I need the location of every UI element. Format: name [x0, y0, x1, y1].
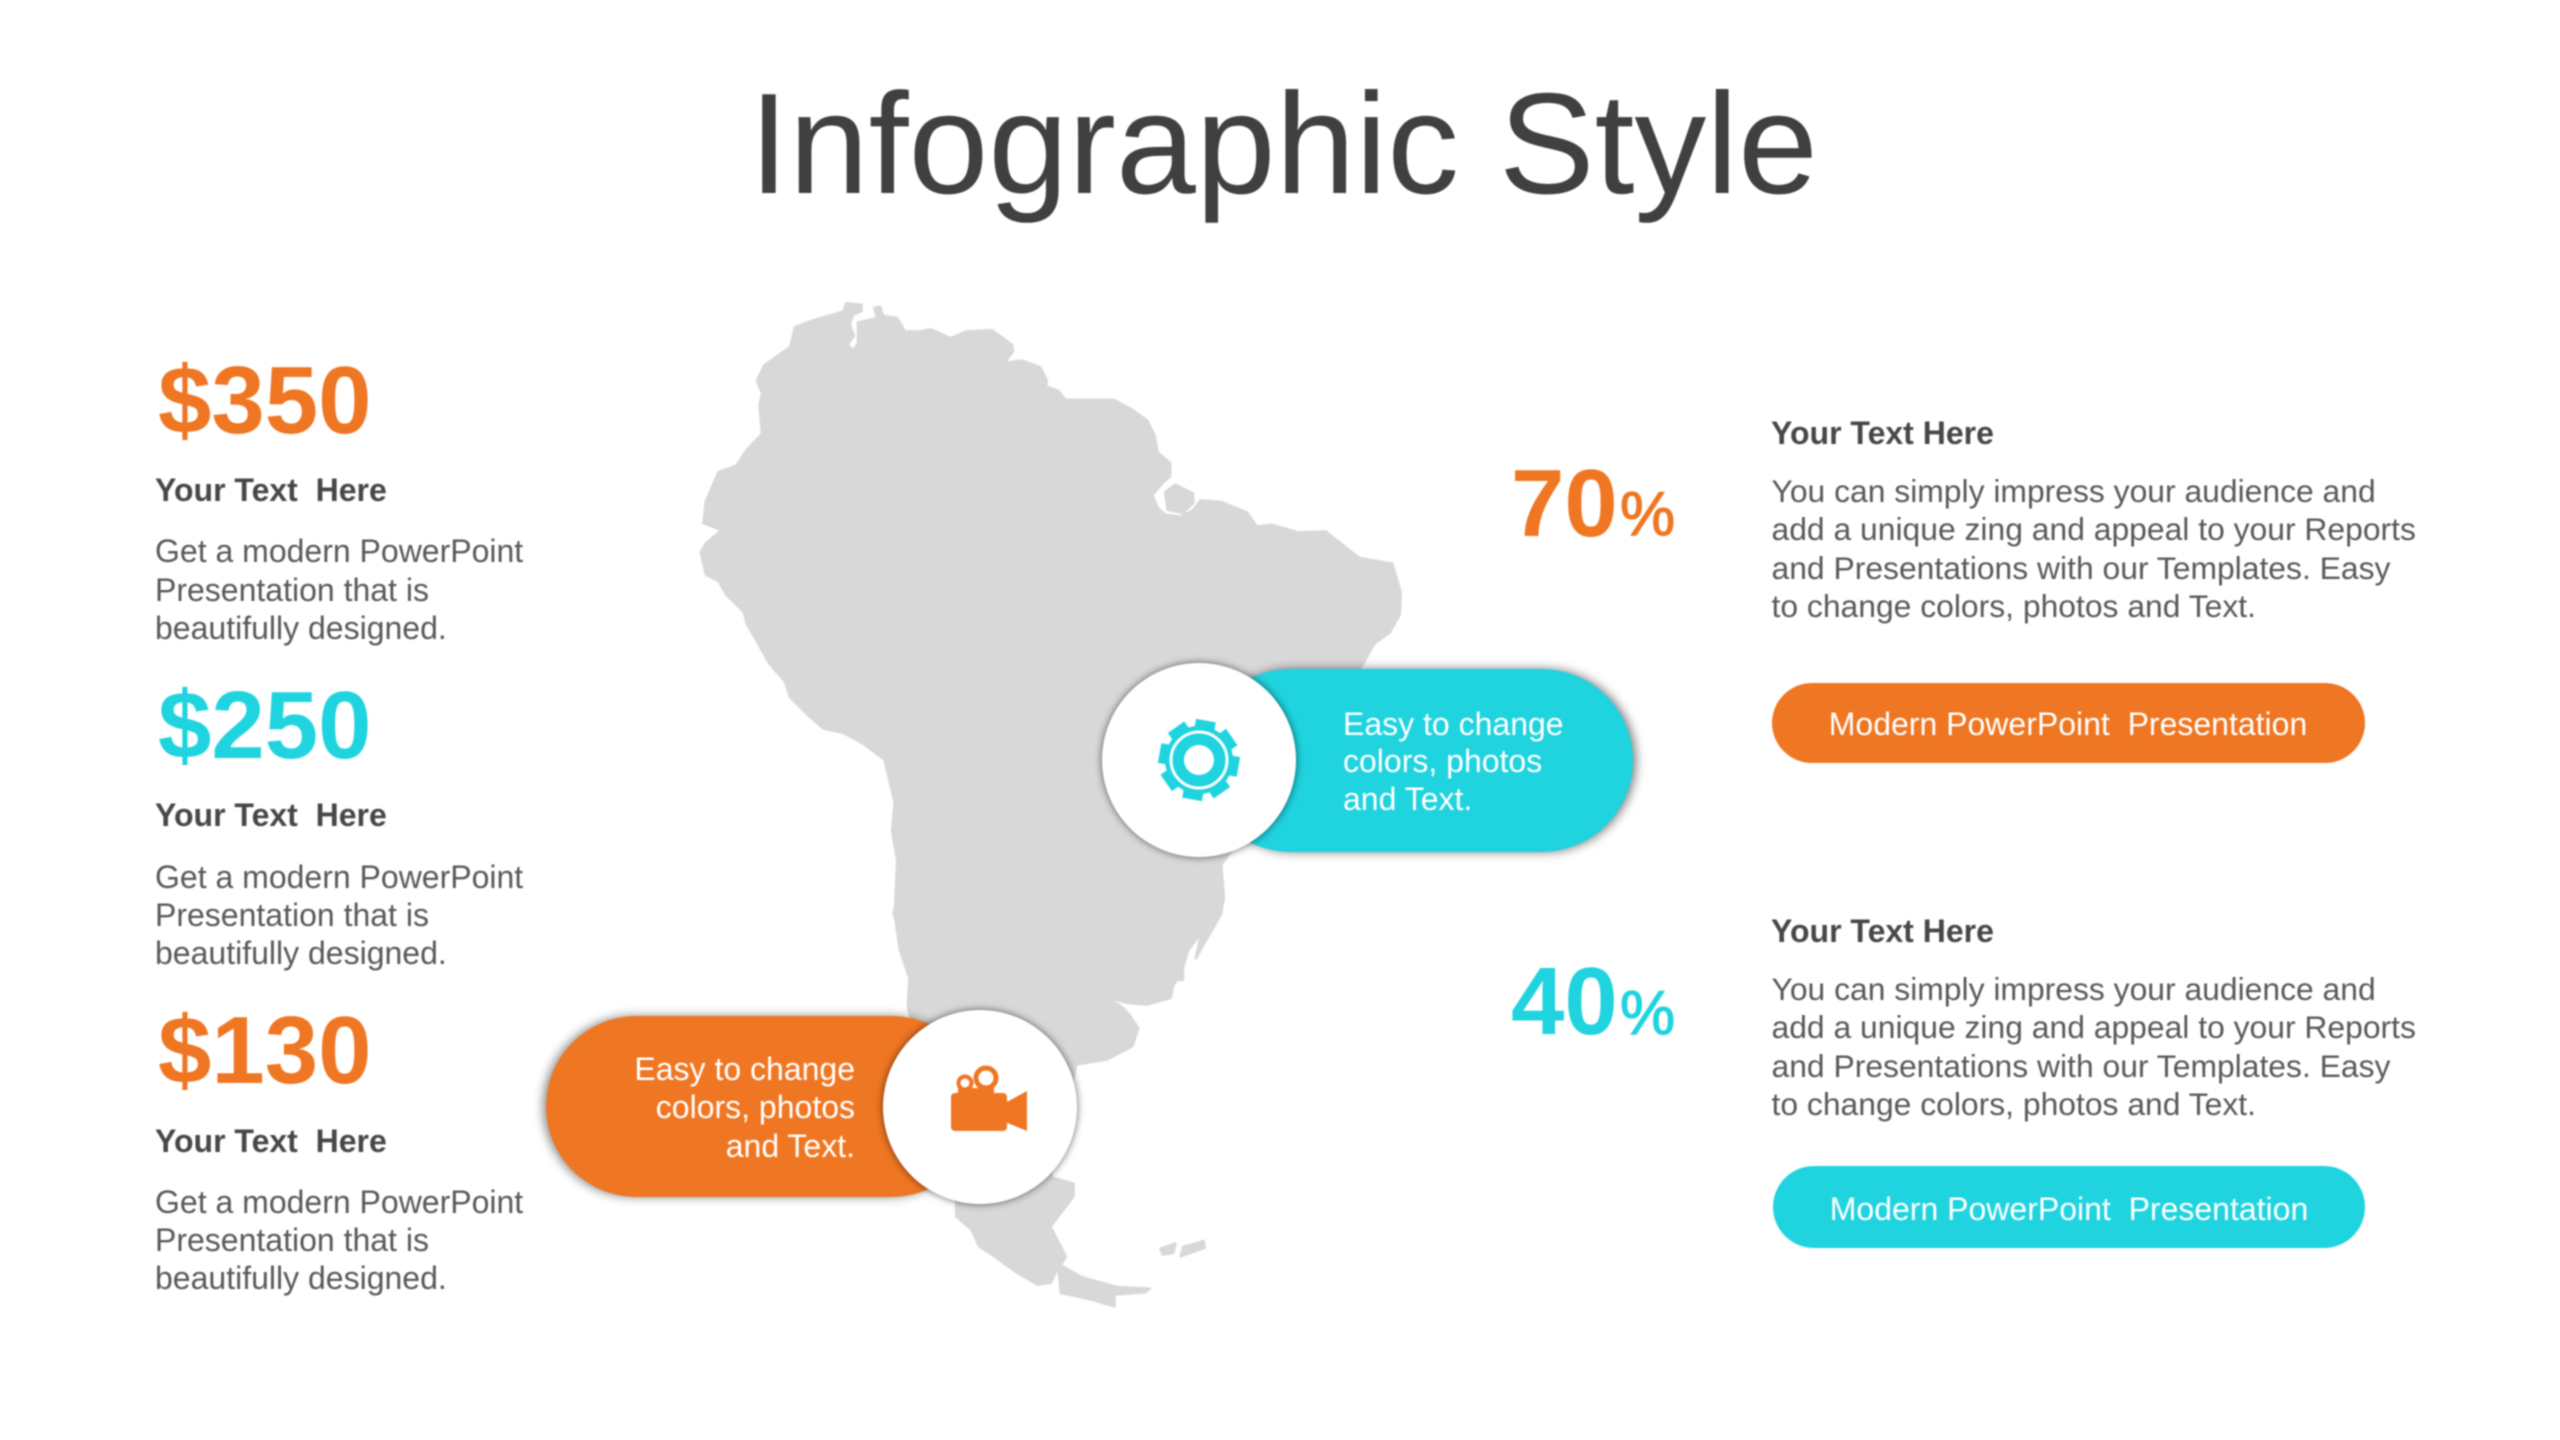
button: orange	[1772, 683, 2365, 763]
price block: $350: beautifully designed.	[155, 610, 447, 646]
map: South America	[701, 303, 1401, 1307]
price block: $250: Presentation that is	[155, 897, 429, 933]
text block: right bottom: Your Text Here	[1771, 913, 1994, 949]
text block: right bottom	[1771, 913, 2416, 1122]
stat: 70%: %	[1620, 480, 1675, 549]
callout: teal pill with gear: and Text.	[1343, 781, 1472, 817]
stat: 40%	[1511, 948, 1675, 1055]
icon: gear	[1158, 719, 1240, 801]
price block: $350: $350	[158, 347, 372, 454]
price block: $350: Presentation that is	[155, 572, 429, 608]
callout: teal pill with gear: Easy to change	[1343, 706, 1564, 742]
callout: teal pill with gear	[1102, 663, 1633, 857]
stat: 70%: 70	[1511, 450, 1618, 557]
text block: right top: to change colors, photos and Text.	[1772, 588, 2256, 624]
button: teal	[1773, 1166, 2365, 1248]
price block: $350: Your Text Here	[155, 472, 387, 508]
price block: $130: Presentation that is	[155, 1222, 429, 1258]
text block: right top: add a unique zing and appeal to your Reports	[1772, 511, 2416, 547]
stat: 40%: 40	[1511, 948, 1618, 1055]
price block: $130: $130	[158, 997, 372, 1104]
text block: right bottom: You can simply impress your audience and	[1772, 971, 2376, 1007]
stat: 70%	[1511, 450, 1675, 557]
text block: right bottom: add a unique zing and appeal to your Reports	[1772, 1009, 2416, 1045]
callout: orange pill with camera: and Text.	[726, 1128, 855, 1164]
text block: right top: You can simply impress your audience and	[1772, 473, 2376, 509]
text block: right top: Your Text Here	[1771, 415, 1994, 451]
text block: right bottom: to change colors, photos and Text.	[1772, 1086, 2256, 1122]
callout: orange pill with camera: colors, photos	[656, 1089, 855, 1125]
callout: orange pill with camera	[546, 1010, 1077, 1204]
callout: orange pill with camera: Easy to change	[634, 1051, 855, 1087]
price block: $350	[155, 347, 523, 646]
text block: right bottom: and Presentations with our Templates. Easy	[1772, 1048, 2391, 1084]
price block: $130: beautifully designed.	[155, 1260, 447, 1296]
price block: $130	[155, 997, 523, 1296]
price block: $250: beautifully designed.	[155, 935, 447, 971]
stat: 40%: %	[1620, 979, 1675, 1048]
text block: right top	[1771, 415, 2416, 624]
price block: $250: $250	[158, 672, 372, 779]
button: orange: Modern PowerPoint Presentation	[1829, 706, 2307, 742]
price block: $250	[155, 672, 523, 971]
price block: $250: Your Text Here	[155, 797, 387, 833]
price block: $350: Get a modern PowerPoint	[155, 533, 523, 569]
callout: teal pill with gear: colors, photos	[1343, 743, 1542, 779]
title: Infographic Style	[749, 64, 1818, 224]
price block: $130: Get a modern PowerPoint	[155, 1184, 523, 1220]
price block: $250: Get a modern PowerPoint	[155, 859, 523, 895]
button: teal: Modern PowerPoint Presentation	[1830, 1191, 2308, 1227]
text block: right top: and Presentations with our Templates. Easy	[1772, 550, 2391, 586]
price block: $130: Your Text Here	[155, 1123, 387, 1159]
icon: video camera	[951, 1068, 1027, 1131]
